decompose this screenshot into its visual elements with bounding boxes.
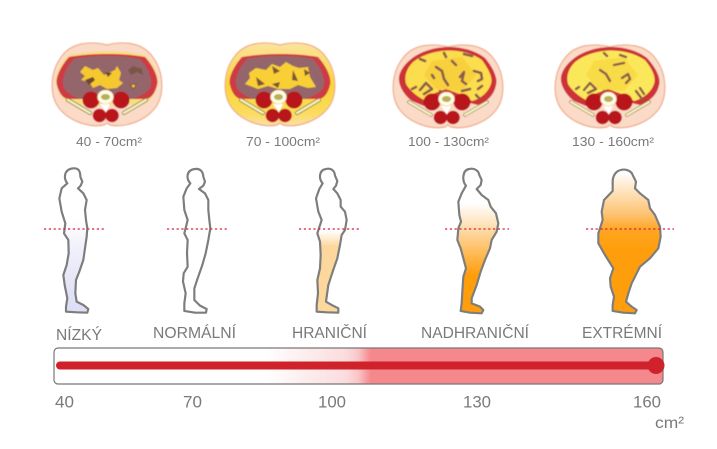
area labels: 40 - 70cm² bbox=[76, 134, 143, 149]
area labels bbox=[76, 134, 655, 149]
waist reference lines bbox=[44, 228, 674, 230]
abdomen cross-section: 100-130 cm2 bbox=[393, 45, 503, 128]
scale numbers: 160 bbox=[633, 392, 661, 412]
area labels: 100 - 130cm² bbox=[408, 134, 490, 149]
abdomen cross-section: 130-160 cm2 bbox=[555, 45, 665, 128]
category labels bbox=[56, 323, 663, 344]
scale numbers: 130 bbox=[463, 392, 491, 412]
figure: normal bbox=[183, 169, 210, 313]
figure: low bbox=[59, 168, 88, 313]
figure: above borderline bbox=[457, 169, 498, 313]
scale numbers: 70 bbox=[183, 392, 202, 412]
scale numbers: 100 bbox=[318, 392, 346, 412]
area labels: 70 - 100cm² bbox=[246, 134, 321, 149]
category labels: NADHRANIČNÍ bbox=[421, 323, 530, 342]
category labels: EXTRÉMNÍ bbox=[582, 323, 663, 342]
risk scale bar bbox=[54, 348, 664, 384]
category labels: HRANIČNÍ bbox=[292, 323, 368, 342]
area labels: 130 - 160cm² bbox=[572, 134, 655, 149]
scale numbers: 40 bbox=[55, 392, 74, 412]
scale numbers bbox=[55, 392, 661, 412]
category labels: NÍZKÝ bbox=[56, 325, 102, 344]
figure: extreme bbox=[598, 170, 661, 313]
unit label: cm² bbox=[655, 415, 685, 432]
figure: borderline bbox=[316, 169, 347, 313]
abdomen cross-section: 40-70 cm2 bbox=[52, 43, 162, 126]
category labels: NORMÁLNÍ bbox=[153, 323, 237, 342]
abdomen cross-section: 70-100 cm2 bbox=[225, 43, 335, 126]
